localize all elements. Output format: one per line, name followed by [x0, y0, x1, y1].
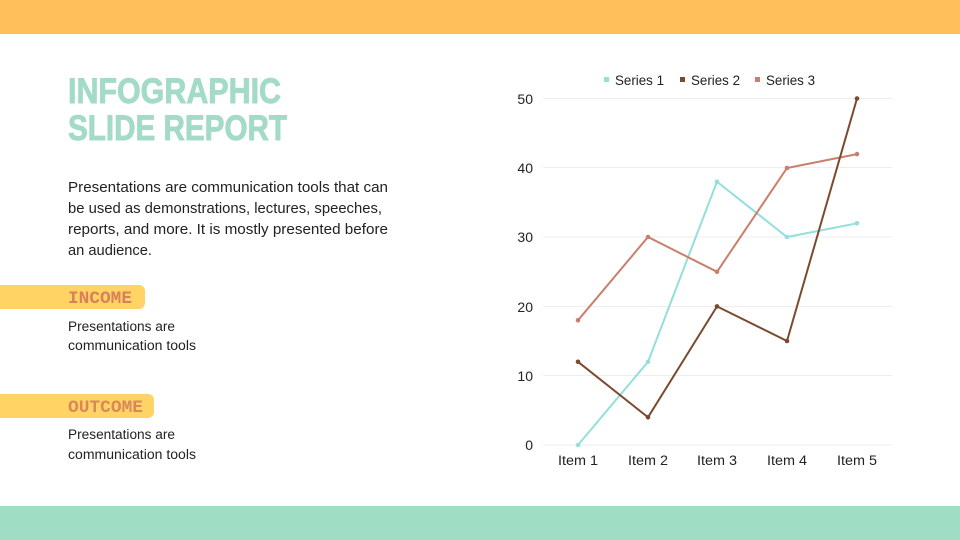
legend: Series 3	[766, 72, 815, 88]
x axis labels	[558, 453, 877, 468]
y axis labels: 20	[517, 299, 533, 315]
outcome heading: OUTCOME	[68, 398, 143, 418]
x axis labels: Item 5	[837, 453, 877, 468]
x axis labels: Item 2	[628, 453, 668, 468]
income description: Presentations are	[68, 319, 175, 334]
top banner	[0, 0, 960, 34]
legend: Series 2	[691, 72, 740, 88]
outcome description	[68, 427, 196, 462]
series 2 line	[576, 96, 859, 420]
x axis labels: Item 3	[697, 453, 737, 468]
y axis labels: 40	[517, 160, 533, 176]
y axis labels	[517, 91, 533, 453]
y axis labels: 0	[525, 437, 533, 453]
line chart	[517, 72, 892, 468]
title: SLIDE REPORT	[68, 109, 287, 148]
outcome description: Presentations are	[68, 427, 175, 442]
intro text block: an audience.	[68, 243, 152, 259]
intro text block: reports, and more. It is mostly presented before	[68, 222, 388, 238]
legend	[604, 72, 815, 88]
income description	[68, 319, 196, 353]
series 3 line	[576, 152, 859, 323]
panel: income	[0, 285, 196, 353]
title	[68, 72, 287, 148]
income description: communication tools	[68, 338, 196, 353]
x axis labels: Item 4	[767, 453, 808, 468]
y axis labels: 30	[517, 229, 533, 245]
y axis labels: 50	[517, 91, 533, 107]
income heading: INCOME	[68, 289, 132, 309]
title: INFOGRAPHIC	[68, 72, 281, 111]
outcome description: communication tools	[68, 447, 196, 462]
series 1 line	[576, 179, 859, 447]
y axis labels: 10	[517, 368, 533, 384]
intro text block	[68, 180, 388, 259]
panel: outcome	[0, 394, 196, 462]
income label pill	[0, 285, 145, 309]
bottom banner	[0, 506, 960, 540]
intro text block: Presentations are communication tools that can	[68, 180, 388, 196]
x axis labels: Item 1	[558, 453, 598, 468]
legend: Series 1	[615, 72, 664, 88]
intro text block: be used as demonstrations, lectures, speeches,	[68, 201, 382, 217]
outcome label pill	[0, 394, 154, 418]
